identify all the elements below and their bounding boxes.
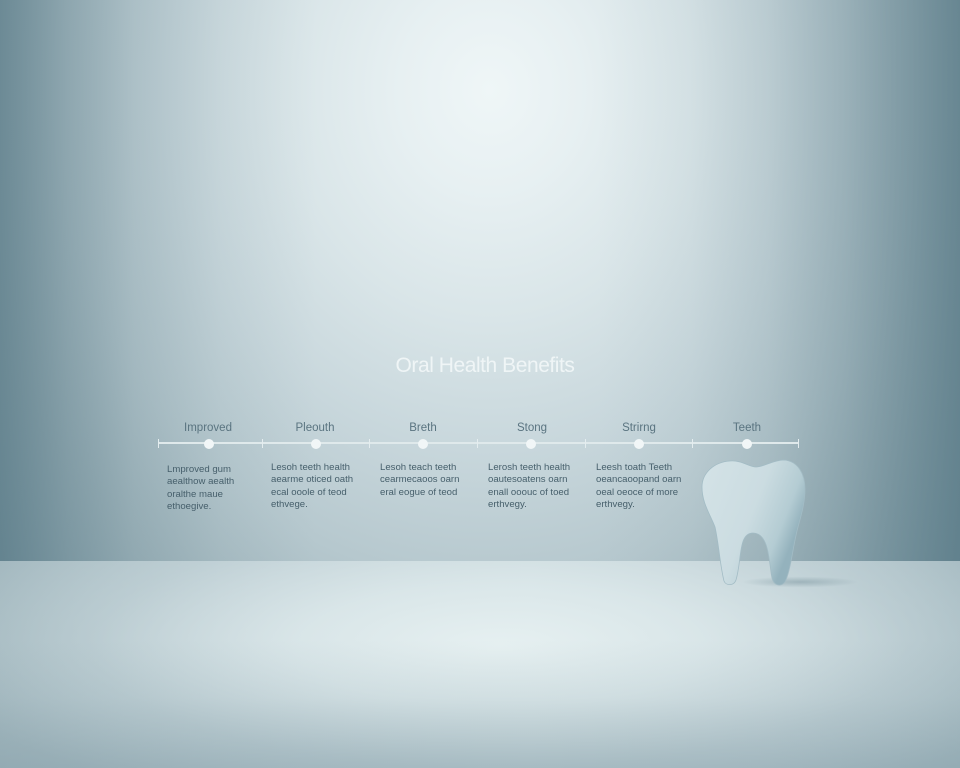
- text block 3: Lesoh teach teeth: [380, 462, 456, 473]
- text block 5: oeal oeoce of more: [596, 487, 678, 498]
- node 4: [526, 439, 536, 449]
- text block 5: [596, 462, 681, 510]
- text block 2: Lesoh teeth health: [271, 462, 350, 473]
- heading: Teeth: Teeth: [733, 422, 761, 434]
- tick 1: [158, 439, 159, 448]
- heading: Strong 2: Strirng: [622, 422, 656, 434]
- icon: tooth: [702, 460, 844, 586]
- tick 5: [585, 439, 586, 448]
- node 1: [204, 439, 214, 449]
- wall edge shading: [0, 0, 960, 561]
- heading: Improved: Improved: [184, 422, 232, 434]
- text block 3: [380, 462, 459, 498]
- node 3: [418, 439, 428, 449]
- heading: Breath: Breth: [409, 422, 437, 434]
- text block 2: aearme oticed oath: [271, 474, 353, 485]
- heading: Fresh: Pleouth: [295, 422, 334, 434]
- node 5: [634, 439, 644, 449]
- text block 5: erthvegy.: [596, 499, 635, 510]
- text block 1: oralthe maue: [167, 489, 223, 500]
- text block 3: eral eogue of teod: [380, 487, 457, 498]
- text block 1: Lmproved gum: [167, 464, 231, 475]
- tooth body: [702, 460, 805, 585]
- text block 2: ecal ooole of teod: [271, 487, 347, 498]
- text block 4: enall ooouc of toed: [488, 487, 569, 498]
- text block 4: [488, 462, 570, 510]
- tick 7: [798, 439, 799, 448]
- floor front shading: [0, 640, 960, 768]
- text block 4: Lerosh teeth health: [488, 462, 570, 473]
- text block 1: [167, 464, 234, 512]
- timeline line: [158, 442, 799, 444]
- node 6: [742, 439, 752, 449]
- text block 4: oautesoatens oarn: [488, 474, 567, 485]
- tick 3: [369, 439, 370, 448]
- tick 2: [262, 439, 263, 448]
- tooth shadow: [742, 576, 858, 588]
- text block 1: ethoegive.: [167, 501, 211, 512]
- node 2: [311, 439, 321, 449]
- text block 5: Leesh toath Teeth: [596, 462, 672, 473]
- tick 4: [477, 439, 478, 448]
- text block 4: erthvegy.: [488, 499, 527, 510]
- text block 5: oeancaoopand oarn: [596, 474, 681, 485]
- text block 2: ethvege.: [271, 499, 308, 510]
- floor: [0, 561, 960, 768]
- text block 1: aealthow aealth: [167, 476, 234, 487]
- text block 2: [271, 462, 353, 510]
- title: Oral Health Benefits: [396, 354, 574, 377]
- timeline: [159, 442, 798, 444]
- text block 3: cearmecaoos oarn: [380, 474, 459, 485]
- background wall: [0, 0, 960, 561]
- heading: Strong: Stong: [517, 422, 547, 434]
- tick 6: [692, 439, 693, 448]
